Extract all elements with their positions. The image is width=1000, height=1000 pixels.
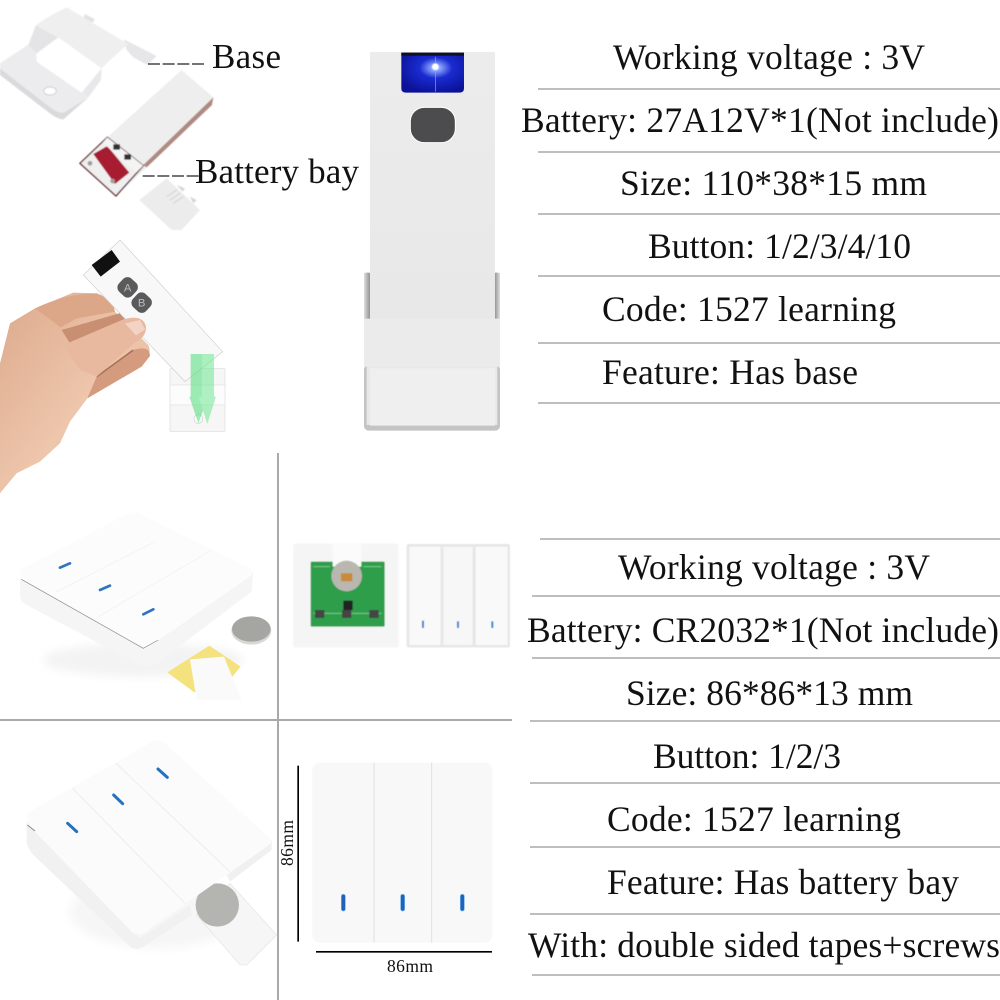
spec: feature: Feature: Has battery bay xyxy=(607,862,959,902)
coin cell xyxy=(231,616,271,645)
white remote with A and B buttons xyxy=(83,240,223,382)
spec: feature: Feature: Has base xyxy=(602,352,858,392)
dimension label: height: 86mm xyxy=(277,820,297,866)
base band xyxy=(364,319,500,367)
switch body xyxy=(20,512,253,666)
remote body xyxy=(370,52,495,320)
wall base xyxy=(170,368,225,432)
dimension bar: height xyxy=(297,766,299,942)
spec: size: Size: 86*86*13 mm xyxy=(626,673,913,713)
label: base: Base xyxy=(212,37,281,76)
specs: wall switch xyxy=(527,539,1000,975)
spec: size: Size: 110*38*15 mm xyxy=(620,163,927,203)
white remote with A and B buttons: B xyxy=(138,298,145,310)
dimension label: width: 86mm xyxy=(387,956,433,976)
hand: palm and fingers xyxy=(0,293,150,493)
spec: code: Code: 1527 learning xyxy=(602,289,896,329)
base bracket xyxy=(0,7,157,119)
label: battery bay: Battery bay xyxy=(195,152,360,191)
inner button covers xyxy=(407,544,510,647)
spec: working voltage: Working voltage : 3V xyxy=(613,37,925,77)
photo: switch internals xyxy=(293,543,510,647)
dimension bar: width xyxy=(316,951,492,953)
base sides xyxy=(364,273,500,431)
photo: hand inserting remote into base xyxy=(0,240,225,493)
battery tray xyxy=(196,883,277,965)
battery cover xyxy=(139,178,200,230)
switch body xyxy=(27,740,272,949)
hand: thumb xyxy=(63,318,146,377)
button xyxy=(410,107,455,143)
white remote with A and B buttons: A xyxy=(124,282,132,294)
spec: working voltage: Working voltage : 3V xyxy=(618,547,930,587)
spec: code: Code: 1527 learning xyxy=(607,799,901,839)
spec: battery: Battery: CR2032*1(Not include) xyxy=(527,610,999,650)
remote back with open battery bay xyxy=(80,70,213,197)
switch front xyxy=(312,763,492,943)
specs: remote xyxy=(521,37,1000,403)
spec: battery: Battery: 27A12V*1(Not include) xyxy=(521,100,999,140)
photo: remote front in base xyxy=(364,52,500,431)
back shell with circuit board xyxy=(293,543,399,647)
lower base plate xyxy=(370,368,495,426)
photo: wall switch with coin cell and tapes xyxy=(20,512,271,700)
spec: button: Button: 1/2/3/4/10 xyxy=(648,226,911,266)
spec: button: Button: 1/2/3 xyxy=(653,736,841,776)
lit display xyxy=(401,53,464,93)
photo: switch front with dimensions xyxy=(297,763,492,953)
leader line: battery bay xyxy=(143,174,200,178)
adhesive tapes xyxy=(167,646,242,700)
spec: accessories: With: double sided tapes+screws xyxy=(528,925,1000,965)
green insertion arrows xyxy=(189,354,216,424)
photo: switch with battery tray xyxy=(27,740,277,965)
photo: exploded remote with base and battery bay xyxy=(0,7,213,230)
leader line: base xyxy=(148,62,204,66)
